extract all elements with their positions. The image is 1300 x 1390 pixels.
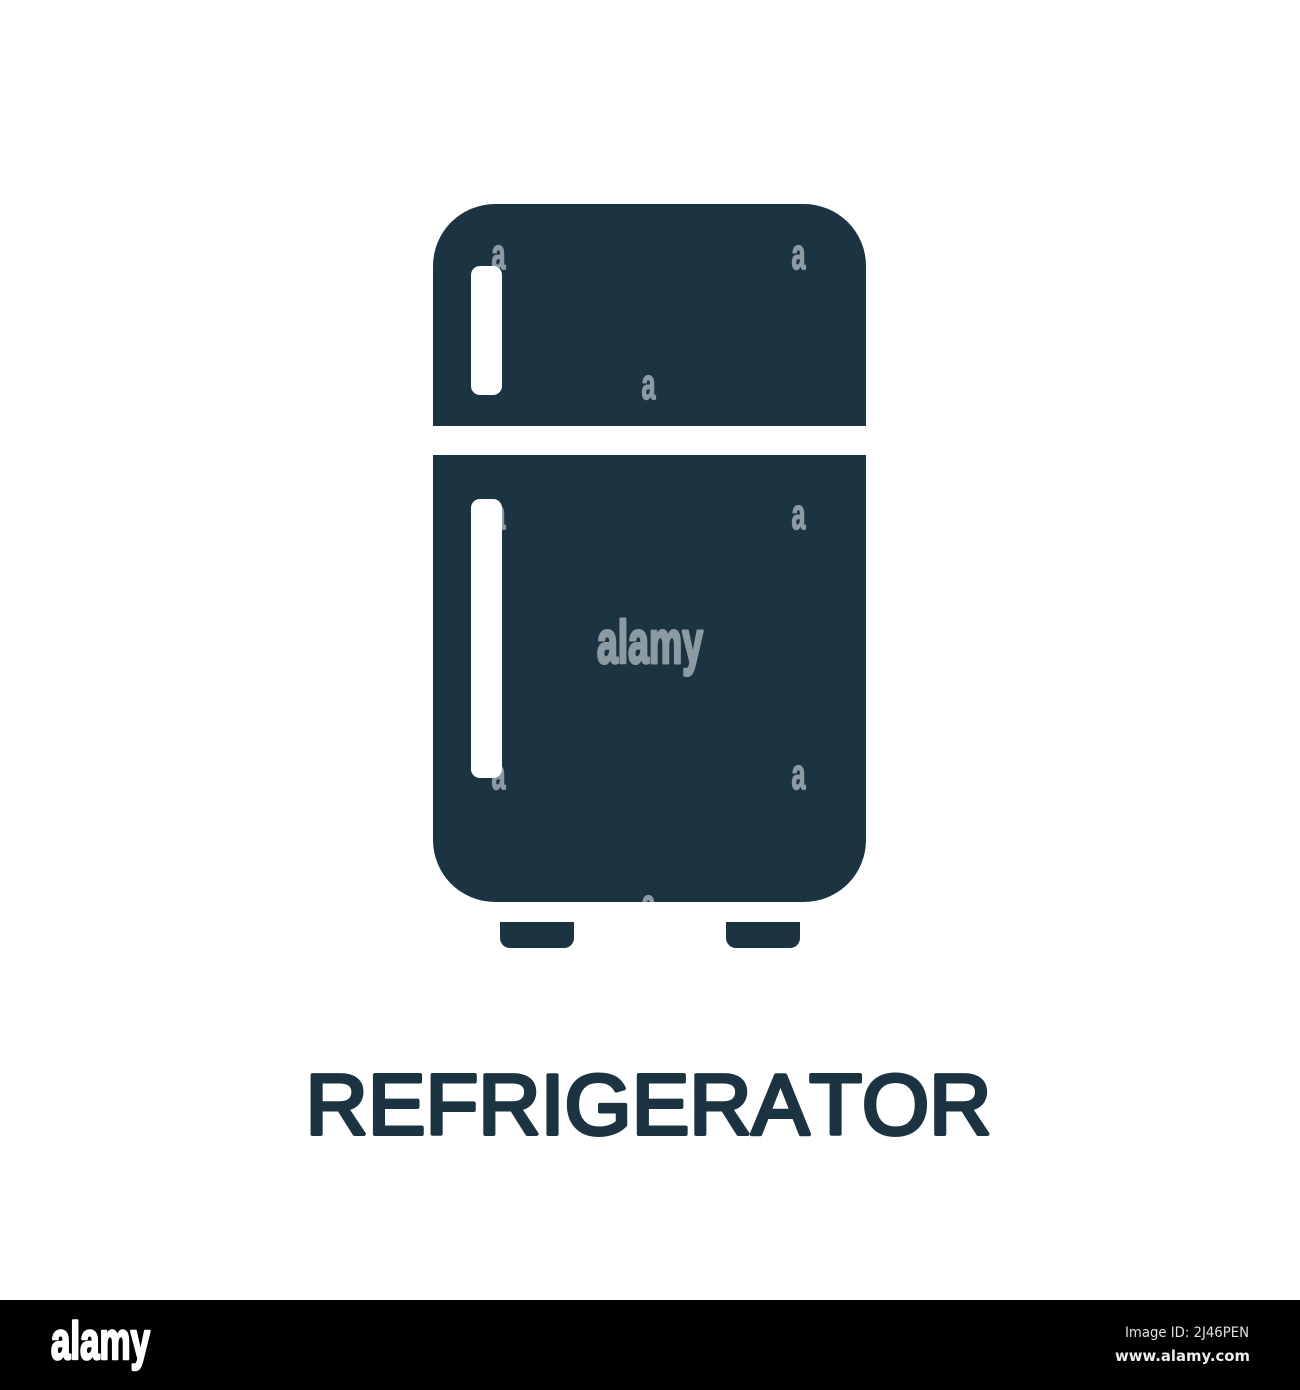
left foot bbox=[500, 922, 574, 948]
repeated watermark marks: a bbox=[792, 230, 806, 279]
website: www.alamy.com bbox=[1115, 1347, 1250, 1365]
upper door bbox=[433, 204, 866, 426]
repeated watermark marks: a bbox=[642, 360, 656, 409]
upper door handle bbox=[471, 266, 502, 395]
lower door bbox=[433, 455, 866, 902]
right foot bbox=[726, 922, 800, 948]
icon: refrigerator bbox=[433, 204, 866, 948]
title: refrigerator label: REFRIGERATOR bbox=[306, 1058, 992, 1153]
footer bar bbox=[0, 1300, 1300, 1390]
repeated watermark marks: a bbox=[492, 490, 506, 539]
lower door handle bbox=[471, 499, 502, 778]
repeated watermark marks bbox=[492, 230, 806, 929]
footer logo: alamy bbox=[51, 1312, 150, 1371]
repeated watermark marks: a bbox=[792, 490, 806, 539]
repeated watermark marks: a bbox=[492, 230, 506, 279]
footer background bbox=[0, 1300, 1300, 1390]
repeated watermark marks: a bbox=[492, 750, 506, 799]
repeated watermark marks: a bbox=[642, 880, 656, 929]
central watermark: alamy bbox=[597, 609, 703, 676]
repeated watermark marks: a bbox=[792, 750, 806, 799]
image id: Image ID: 2J46PEN bbox=[1125, 1325, 1249, 1341]
